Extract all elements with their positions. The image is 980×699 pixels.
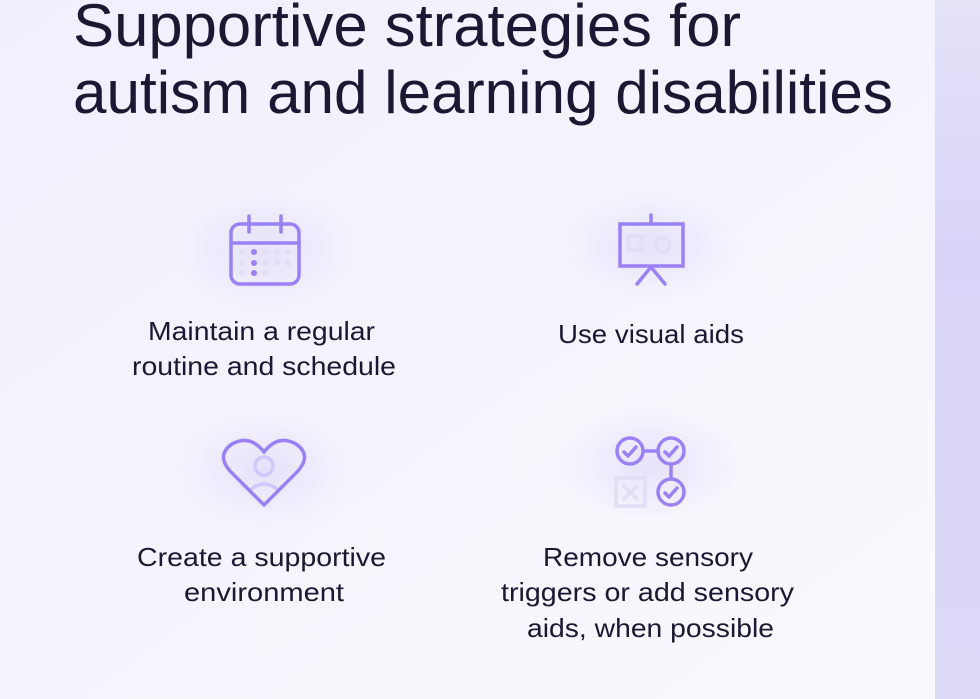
text: routine bbox=[132, 316, 396, 381]
title bbox=[73, 0, 893, 126]
text: supportive environment: Create a supportive bbox=[137, 542, 386, 572]
text: sensory: triggers or add sensory bbox=[501, 577, 794, 607]
icon: heart bbox=[223, 440, 305, 505]
icon: checklist bbox=[616, 438, 684, 506]
text: sensory: aids, when possible bbox=[527, 613, 774, 643]
title: autism and learning disabilities bbox=[73, 59, 893, 126]
icon: presentation board bbox=[620, 215, 683, 284]
text: visual aids: Use visual aids bbox=[558, 319, 744, 349]
text: sensory: Remove sensory bbox=[543, 542, 753, 572]
right strip bbox=[935, 0, 980, 699]
icon: calendar bbox=[231, 216, 299, 284]
text: sensory bbox=[501, 542, 794, 643]
text: supportive environment: environment bbox=[184, 577, 345, 607]
text: supportive environment bbox=[137, 542, 386, 607]
text: routine: routine and schedule bbox=[132, 351, 396, 381]
text: routine: Maintain a regular bbox=[148, 316, 375, 346]
